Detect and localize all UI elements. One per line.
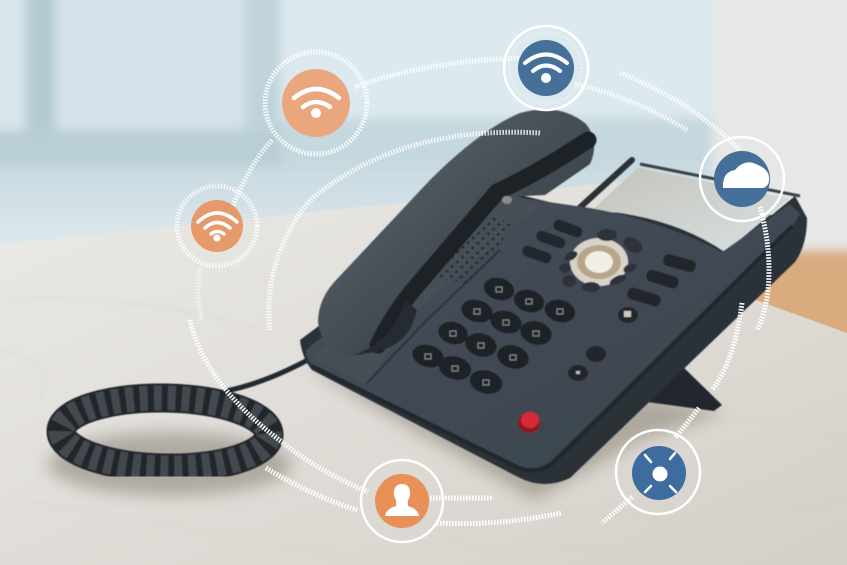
arc: upper right short bbox=[575, 84, 687, 130]
phone body side bbox=[300, 190, 807, 484]
front bevel line bbox=[312, 226, 792, 471]
desk phone bbox=[300, 109, 807, 484]
handset rest arm bbox=[575, 160, 632, 212]
handset cradle panel bbox=[312, 190, 540, 384]
arc: orange wifi to blue wifi bbox=[355, 58, 525, 87]
arc: right down to stand bbox=[712, 303, 742, 390]
dial keypad bbox=[410, 274, 578, 397]
arc: sweep through cord bbox=[190, 320, 368, 492]
node: blue hub bbox=[616, 430, 700, 514]
icon: hub bbox=[645, 453, 676, 492]
arc: lower desk curve bbox=[266, 468, 357, 510]
softkeys bbox=[626, 253, 697, 308]
screen top edge bbox=[640, 164, 800, 196]
node: orange person bbox=[361, 460, 443, 542]
navigation cluster bbox=[559, 229, 645, 292]
node: small orange wifi bbox=[177, 186, 257, 266]
shadow under phone and cord bbox=[48, 365, 725, 500]
node: large orange wifi bbox=[265, 52, 367, 154]
icon: wifi signal bbox=[198, 213, 237, 242]
keypad panel seam bbox=[366, 250, 500, 384]
kickstand bbox=[632, 362, 722, 411]
speaker grille bbox=[428, 216, 516, 283]
cord wire bbox=[226, 338, 345, 391]
icon: cloud bbox=[723, 162, 769, 188]
arc: person right lower bbox=[437, 513, 561, 524]
screen bbox=[592, 168, 790, 252]
top surface bbox=[306, 195, 800, 469]
red button bbox=[518, 412, 540, 433]
node: blue wifi bbox=[504, 26, 588, 110]
handset bbox=[318, 109, 594, 356]
blurred window background bbox=[0, 0, 847, 350]
arc: bottom node tail bbox=[602, 497, 632, 523]
node: blue cloud bbox=[700, 137, 784, 221]
coil ring bbox=[60, 396, 270, 470]
key markings bbox=[425, 287, 563, 385]
table top bbox=[0, 180, 847, 565]
coiled phone cord bbox=[60, 338, 345, 470]
icon: wifi bbox=[294, 89, 339, 118]
network connection arcs bbox=[190, 58, 769, 524]
arc: person right upper bbox=[427, 496, 492, 500]
arc: dashed to blue node bbox=[675, 408, 699, 438]
icon: person bbox=[385, 484, 419, 516]
arc: cloud downward bbox=[757, 207, 769, 330]
top buttons bbox=[521, 218, 584, 265]
icon: wifi bbox=[525, 54, 567, 83]
arc: upper right long bbox=[620, 73, 740, 150]
small function keys bbox=[568, 307, 638, 381]
arc: over handset curving to desk bbox=[269, 132, 540, 330]
arc: left desk curve bbox=[198, 268, 202, 322]
arc: wifi link bbox=[222, 140, 272, 240]
